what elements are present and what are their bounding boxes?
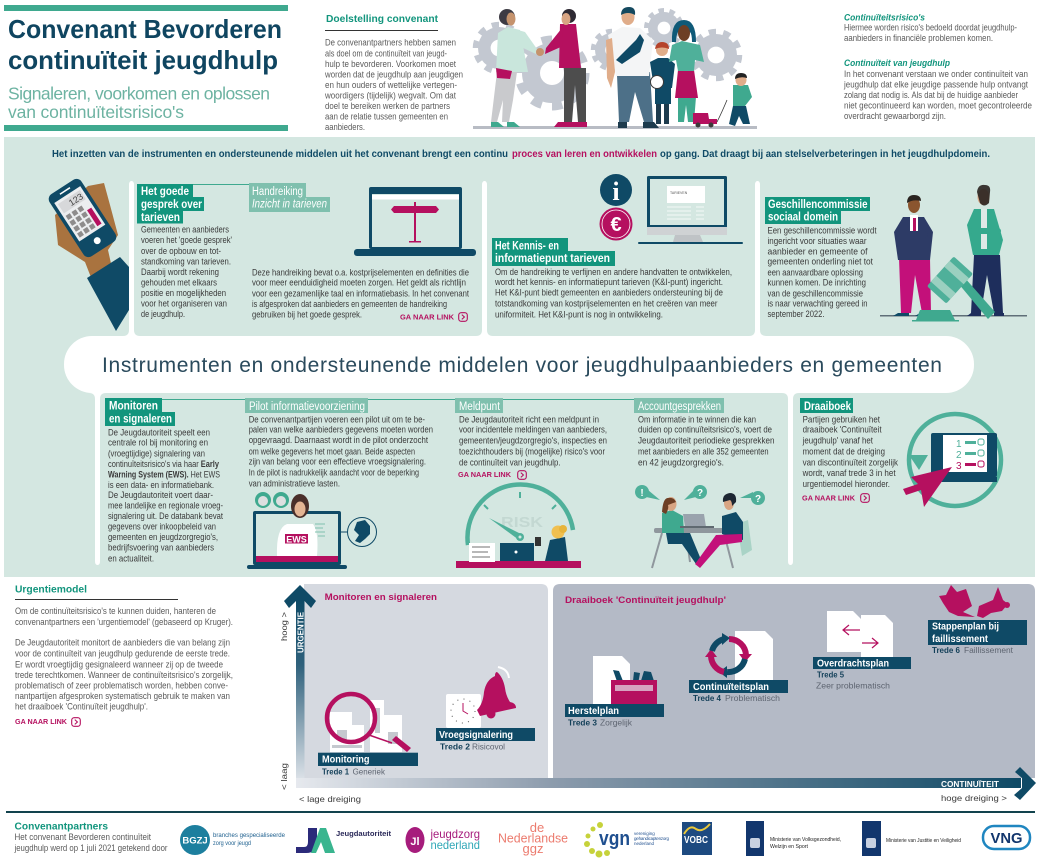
logo: jeugdzorg nederland: jeugdzorg <box>430 827 480 841</box>
label: en signaleren <box>109 413 172 425</box>
card: Pilot informatievoorziening <box>245 398 433 569</box>
card: Geschillencommissie: gemeenten onderling niet tot <box>768 257 874 267</box>
card: Kennis- en informatiepunt: Het K&I-punt biedt gemeenten en aanbieders ondersteuning bij de <box>495 288 723 298</box>
right man <box>967 185 1004 316</box>
label <box>800 398 853 413</box>
logo: jeugdzorg nederland <box>406 827 480 853</box>
label: tarieven <box>141 212 180 224</box>
subtitle: Signaleren, voorkomen en oplossen <box>8 84 270 104</box>
logo: Ministerie JenV <box>862 821 961 856</box>
icon: info: i <box>612 177 620 206</box>
panel: monitoren en signaleren <box>304 584 548 778</box>
title block <box>4 5 288 131</box>
footer text <box>14 820 168 853</box>
icon: broken piggy bank <box>939 585 1010 618</box>
icon: document and toolbox <box>593 656 657 704</box>
card: Meldpunt: de continuïteit van jeugdhulp. <box>459 457 560 467</box>
left man <box>893 195 933 316</box>
arrow: urgentie axis: hoog > <box>279 612 289 641</box>
card: Geschillencommissie: ingericht voor situaties waar <box>768 236 867 246</box>
card: Het goede gesprek over tarieven: voor het organiseren van <box>141 298 227 308</box>
text block: Urgentiemodel <box>15 583 233 726</box>
illustration: conversation at table <box>635 485 765 568</box>
card: Handreiking: voor een gezamenlijke taal en informatiebasis. In het convenant <box>252 288 469 298</box>
icon: laptop with signpost <box>354 187 476 256</box>
label: Overdrachtsplan: Zeer problematisch <box>816 680 890 690</box>
card: Kennis- en informatiepunt: uniformiteit. Het K&I-punt is nog in ontwikkeling. <box>495 309 663 319</box>
text block: Doelstelling convenant: Doelstelling convenant <box>326 13 438 25</box>
label: Continuïteitsplan <box>689 680 788 703</box>
logo: BGZJ <box>180 825 286 855</box>
card: Monitoren en signaleren: mee landelijke en regionale vroeg- <box>108 500 223 510</box>
man in magenta <box>536 9 587 127</box>
intro sentence <box>52 149 990 160</box>
card: Meldpunt: gemeenten/jeugdzorgregio's, inspecties en <box>459 435 607 445</box>
label: Continuïteitsplan: Problematisch <box>725 693 780 703</box>
toy truck <box>693 113 717 128</box>
logo: de Nederlandse ggz: ggz <box>523 841 543 856</box>
label: Continuïteitsplan: Continuïteitsplan <box>693 681 769 693</box>
card: Kennis- en informatiepunt: Om de handreiking te verfijnen en andere handvatten te ontwikkelen, <box>495 267 732 277</box>
text block: Doelstelling convenant: als doel om de continuïteit van jeugd- <box>325 48 447 58</box>
label: Stappenplan bij faillissement: Faillissement <box>964 645 1014 655</box>
text block: Urgentiemodel: Urgentiemodel <box>15 583 87 595</box>
card: Accountgesprekken: en 42 jeugdzorgregio's. <box>638 457 724 467</box>
card: Het goede gesprek over tarieven: Gemeenten en aanbieders <box>141 224 230 234</box>
card: Geschillencommissie: kunnen komen. De inrichting <box>768 278 866 288</box>
text block: definitions: zolang dat nodig is. Als dat bij de huidige aanbieder <box>844 90 1018 100</box>
label: gesprek over <box>141 199 202 211</box>
panel: draaiboek <box>553 584 1035 778</box>
label: Vroegsignalering <box>436 728 535 752</box>
link <box>458 471 526 479</box>
card: Accountgesprekken: met aanbieders en alle 352 gemeenten <box>638 446 769 456</box>
intro sentence: op gang. Dat draagt bij aan stelselverbeteringen in het jeugdhulpdomein. <box>660 149 990 160</box>
arrow: continuïteit axis <box>296 767 1036 804</box>
card: Geschillencommissie: een aanvaardbare oplossing <box>768 267 863 277</box>
label: Monitoring: Generiek <box>353 766 386 776</box>
logo: Ministerie VWS: Welzijn en Sport <box>770 844 808 850</box>
text block: Urgentiemodel: problematisch of zeer problematisch worden, hebben conve- <box>15 681 228 691</box>
logo: vgn: nederland <box>634 841 655 846</box>
link: GA NAAR LINK <box>15 719 67 726</box>
card: Pilot informatievoorziening: palen van welke aanbieders gegevens moeten worden <box>249 424 433 434</box>
label: Meldpunt <box>459 401 501 413</box>
label: Herstelplan: Zorgelijk <box>600 718 633 728</box>
card: Monitoren en signaleren: bedrijfsvoering van aanbieders <box>108 543 215 553</box>
icon: document and cycle arrows <box>705 631 773 680</box>
card: Accountgesprekken: Jeugdautoriteit periodieke gesprekken <box>638 435 775 445</box>
card: Monitoren en signaleren: De Jeugdautoriteit speelt een <box>108 427 210 437</box>
gavel <box>912 256 995 322</box>
text block: Doelstelling convenant: en hun ouders of wettelijke vertegen- <box>325 80 457 90</box>
label: Draaiboek <box>804 401 852 413</box>
intro sentence: Het inzetten van de instrumenten en ondersteunende middelen uit het convenant brengt een continu <box>52 149 508 160</box>
arrow: continuïteit axis: < lage dreiging <box>299 794 361 804</box>
card: Draaiboek: urgentiemodel hieronder. <box>803 479 890 489</box>
footer: convenantpartners <box>6 811 1035 858</box>
logo: BGZJ: BGZJ <box>182 836 208 846</box>
label <box>492 238 615 266</box>
card: Draaiboek: Partijen gebruiken het <box>803 414 880 424</box>
card: Monitoren en signaleren: is een data- en informatiebank. <box>108 480 214 490</box>
panel: monitoren en signaleren: Monitoren en signaleren <box>325 592 437 603</box>
illustration: conversation at table: ? <box>697 488 703 499</box>
boy with football <box>650 42 675 124</box>
logo: de Nederlandse ggz: de <box>530 820 544 835</box>
card: Meldpunt <box>455 398 607 568</box>
card: Het goede gesprek over tarieven: gehouden met elkaars <box>141 278 218 288</box>
label: Monitoring: Trede 1 <box>322 766 349 776</box>
text block: definitions: Continuïteitsrisico's <box>844 12 925 22</box>
text block: definitions <box>843 12 1032 121</box>
label <box>455 398 503 413</box>
text block: Urgentiemodel: Er wordt vroegtijdig gesignaleerd wanneer zij op de tweede <box>15 659 223 669</box>
logo: VNG <box>983 826 1030 849</box>
card: Monitoren en signaleren: signalering uit. De databank bevat <box>108 511 223 521</box>
icon: euro <box>600 208 632 240</box>
card: Draaiboek: draaiboek 'Continuïteit <box>803 425 882 435</box>
illustration: two men and gavel <box>880 185 1027 322</box>
logo: Ministerie JenV: Ministerie van Justitie en Veiligheid <box>886 838 961 844</box>
illustration: people and gears <box>473 7 757 129</box>
link <box>802 494 869 502</box>
label <box>765 197 870 224</box>
text block: Urgentiemodel: Om de continuïteitsrisico's te kunnen duiden, hanteren de <box>15 606 216 616</box>
man with bag <box>606 7 659 128</box>
card: Kennis- en informatiepunt <box>492 174 743 319</box>
label: Het goede <box>141 186 189 198</box>
label: Stappenplan bij faillissement: Trede 6 <box>932 645 960 655</box>
text block: Doelstelling convenant: doel te bereiken werken de partners <box>325 101 451 111</box>
illustration: conversation at table: ? <box>755 494 761 505</box>
subtitle <box>8 84 270 122</box>
card: Monitoren en signaleren: gemeenten en jeugdzorgregio's, <box>108 532 218 542</box>
arrow: urgentie axis: < laag <box>279 763 289 790</box>
card: Geschillencommissie: aanbieder en gemeente of <box>768 247 868 257</box>
subtitle: van continuïteitsrisico's <box>8 102 184 122</box>
intro sentence: proces van leren en ontwikkelen <box>512 149 657 160</box>
icon: two documents with arrows <box>827 611 893 657</box>
label: Vroegsignalering: Risicovol <box>472 742 505 752</box>
woman shaking hands <box>491 9 537 127</box>
card: Handreiking: Deze handreiking bevat o.a. kostprijselementen en definities die <box>252 267 469 277</box>
label: Stappenplan bij faillissement: faillissement <box>932 633 988 645</box>
card: Monitoren en signaleren: Warning System (EWS). Het EWS <box>108 470 220 480</box>
link <box>400 313 467 322</box>
label: Herstelplan: Herstelplan <box>568 705 619 717</box>
card: Handreiking <box>249 183 476 322</box>
label: Stappenplan bij faillissement <box>928 620 1027 655</box>
label: Het Kennis- en <box>495 240 559 252</box>
label: Pilot informatievoorziening <box>249 401 365 413</box>
card: Pilot informatievoorziening: In de pilot is nadrukkelijk aandacht voor de beperking <box>249 467 419 477</box>
woman with teal top <box>669 20 704 122</box>
label <box>249 183 330 212</box>
card: Draaiboek: wordt, vanaf trede 3 in het <box>802 468 896 478</box>
icon: city under magnifier <box>327 694 411 752</box>
card: Pilot informatievoorziening: De convenantpartijen voeren een pilot uit om te be- <box>249 414 425 424</box>
logo: vgn: vereniging <box>634 831 655 836</box>
illustration: risk gauge: RISK <box>501 514 543 531</box>
arrow: urgentie axis <box>279 585 316 790</box>
title: continuïteit jeugdhulp <box>8 45 278 75</box>
card: Pilot informatievoorziening: van administratieve lasten. <box>249 478 340 488</box>
illustration: EWS laptop: EWS <box>286 534 307 544</box>
text block: Urgentiemodel: voor de continuïteit van jeugdhulp gedurende de eerste trede. <box>15 648 230 658</box>
logo: Ministerie VWS: Ministerie van Volksgezondheid, <box>770 837 841 843</box>
card: Het goede gesprek over tarieven: over de opbouw en tot- <box>141 246 221 256</box>
text block: Urgentiemodel: De Jeugdautoriteit monitort de aanbieders die van belang zijn <box>15 638 230 648</box>
text block: Doelstelling convenant: aanbieders. <box>325 122 365 132</box>
card: Het goede gesprek over tarieven <box>137 184 250 319</box>
logo: vgn: vgn <box>599 828 630 850</box>
link: GA NAAR LINK <box>802 496 855 502</box>
label: Continuïteitsplan: Trede 4 <box>693 693 721 703</box>
text block: Doelstelling convenant: woordigers (tijdelijk) wegvalt. Om dat <box>324 90 457 100</box>
icon: phone with calculator: 123 <box>67 191 85 208</box>
label: informatiepunt tarieven <box>495 253 610 265</box>
card: Monitoren en signaleren: en actualiteit. <box>108 553 154 563</box>
text block: Urgentiemodel: nantpartijen afgesproken systematisch gebruik te maken van <box>15 691 230 701</box>
label: Monitoren <box>109 400 158 412</box>
text block: Doelstelling convenant: worden dat de jeugdhulp aan jeugdigen <box>324 69 463 79</box>
icon: euro: € <box>610 214 622 236</box>
card: Monitoren en signaleren: (vroegtijdige) signalering van <box>108 448 205 458</box>
text block: definitions: aanbieders in financiële problemen komen. <box>844 33 993 43</box>
text block: definitions: Continuïteit van jeugdhulp <box>844 58 950 68</box>
card: Accountgesprekken: duiden op continuïteitsrisico's, voert de <box>638 425 772 435</box>
card: Handreiking: voor meer eenduidigheid moeten zorgen. Het geldt als richtlijn <box>252 278 466 288</box>
icon: info <box>600 174 632 206</box>
label <box>634 398 724 413</box>
card: Geschillencommissie: van de geschillencommissie <box>768 288 863 298</box>
icon: clock and bell <box>446 667 516 728</box>
card: Meldpunt: De Jeugdautoriteit richt een meldpunt in <box>459 414 599 424</box>
icon: phone with calculator <box>46 177 129 331</box>
card: Draaiboek <box>800 398 1001 507</box>
label: Overdrachtsplan <box>813 657 911 690</box>
card: Kennis- en informatiepunt: totstandkoming van kostprijselementen en het creëren van meer <box>495 298 718 308</box>
logo: VOBC <box>682 822 712 855</box>
label: Overdrachtsplan: Trede 5 <box>817 670 844 680</box>
icon: cycle with laptop <box>903 414 1001 507</box>
logo: vgn: gehandicaptenzorg <box>634 836 669 841</box>
label: Herstelplan <box>565 704 664 728</box>
card: Handreiking: gebruiken bij het goede gesprek. <box>252 309 362 319</box>
card: Meldpunt: toezichthouders bij (mogelijke) risico's voor <box>459 446 605 456</box>
label: Monitoring <box>318 753 418 776</box>
footer text: Convenantpartners <box>14 820 108 832</box>
logo: vgn <box>584 822 669 858</box>
text block: Doelstelling convenant: De convenantpartners hebben samen <box>325 38 456 48</box>
text block: Doelstelling convenant <box>324 13 463 132</box>
icon: monitor: TARIEVEN <box>670 191 688 195</box>
card: Monitoren en signaleren <box>105 398 223 563</box>
arrow: continuïteit axis: CONTINUÏTEIT <box>941 779 1000 789</box>
card: Draaiboek: van discontinuïteit zorgelijk <box>803 457 899 467</box>
card: Geschillencommissie: Een geschillencommissie wordt <box>768 226 877 236</box>
title <box>8 14 282 75</box>
label: Herstelplan: Trede 3 <box>568 718 597 728</box>
card: Het goede gesprek over tarieven: standkoming van tarieven. <box>141 256 231 266</box>
label: Monitoring: Monitoring <box>322 754 370 766</box>
logo: BGZJ: branches gespecialiseerde <box>213 833 286 839</box>
logo: de Nederlandse ggz: Nederlandse <box>498 830 568 846</box>
card: Het goede gesprek over tarieven: Daarbij wordt rekening <box>141 267 219 277</box>
label <box>137 184 204 224</box>
logo: BGZJ: zorg voor jeugd <box>213 841 251 847</box>
card: Monitoren en signaleren: centrale rol bij monitoring en <box>108 438 208 448</box>
label: Vroegsignalering: Vroegsignalering <box>439 729 513 741</box>
link <box>15 718 80 726</box>
card: Het goede gesprek over tarieven: de jeugdhulp. <box>141 309 185 319</box>
card: Meldpunt: voor incidentele meldingen van aanbieders, <box>459 425 607 435</box>
label: Accountgesprekken <box>638 401 721 413</box>
label <box>105 398 175 426</box>
logo: jeugdzorg nederland: nederland <box>430 838 480 852</box>
label: Vroegsignalering: Trede 2 <box>440 742 470 752</box>
illustration: conversation at table: ! <box>640 488 644 499</box>
text block: Urgentiemodel: trede terechtkomen. Wanneer de continuïteitsrisico's zorgelijk, <box>15 670 233 680</box>
card: Handreiking: is afgesproken dat aanbieders en gemeenten de handreiking <box>252 299 447 309</box>
icon: cycle with laptop: 2 <box>956 450 962 461</box>
arrow: continuïteit axis: hoge dreiging > <box>941 793 1007 803</box>
text block: Doelstelling convenant: hulp te bevorderen. Voorkomen moet <box>325 59 457 69</box>
logo: Jeugdautoriteit <box>296 828 392 853</box>
card: Draaiboek: jeugdhulp' vanaf het <box>802 435 873 445</box>
label: sociaal domein <box>768 212 838 224</box>
logo: jeugdzorg nederland: Jl <box>410 836 420 848</box>
title: Convenant Bevorderen <box>8 14 282 44</box>
icon: cycle with laptop: 1 <box>956 439 962 450</box>
card: Geschillencommissie: september 2022. <box>768 309 824 319</box>
card: Kennis- en informatiepunt: wordt het kennis- en informatiepunt tarieven (K&I-punt) ingericht. <box>494 277 723 287</box>
label: Geschillencommissie <box>768 199 868 211</box>
illustration: EWS laptop <box>247 492 376 569</box>
card: Monitoren en signaleren: De Jeugdautoriteit voert daar- <box>108 490 213 500</box>
label: Handreiking <box>252 186 303 198</box>
illustration: risk gauge <box>456 484 581 568</box>
link: GA NAAR LINK <box>400 314 454 322</box>
panel: draaiboek: Draaiboek 'Continuïteit jeugdhulp' <box>565 595 726 606</box>
label: Stappenplan bij faillissement: Stappenplan bij <box>932 620 999 632</box>
label: Inzicht in tarieven <box>252 198 327 210</box>
label: Overdrachtsplan: Overdrachtsplan <box>817 658 889 670</box>
logo: Jeugdautoriteit: Jeugdautoriteit <box>336 829 392 838</box>
card: Het goede gesprek over tarieven: voeren het 'goede gesprek' <box>141 235 232 245</box>
link: GA NAAR LINK <box>458 472 511 479</box>
card: Het goede gesprek over tarieven: positie en mogelijkheden <box>141 288 226 298</box>
text block: Urgentiemodel: convenantpartners een 'urgentiemodel' (gebaseerd op Kruger). <box>15 617 233 627</box>
footer text: jeugdhulp werd op 1 juli 2021 getekend door <box>14 843 168 853</box>
heading pill: Instrumenten en ondersteunende middelen voor jeugdhulpaanbieders en gemeenten <box>102 354 942 377</box>
card: Draaiboek: moment dat de dreiging <box>803 446 885 456</box>
text block: definitions: overdracht gewaarborgd zijn. <box>844 111 946 121</box>
icon: monitor <box>638 176 743 244</box>
logo: VOBC: VOBC <box>684 835 708 846</box>
card: Pilot informatievoorziening: zijn van belang voor een effectieve vroegsignalering. <box>249 457 426 467</box>
logo: de Nederlandse ggz <box>498 820 568 856</box>
chart: urgentiemodel <box>279 584 1036 804</box>
icon: cycle with laptop: 3 <box>956 461 962 472</box>
card: Accountgesprekken <box>634 398 775 568</box>
card: Monitoren en signaleren: gegevens over inkoopbeleid van <box>108 522 216 532</box>
text block: Urgentiemodel: het draaiboek 'Continuïteit jeugdhulp'. <box>15 701 148 711</box>
logo: VNG: VNG <box>990 830 1022 847</box>
arrow: urgentie axis: URGENTIE <box>296 612 306 653</box>
card: Geschillencommissie <box>765 197 877 319</box>
footer text: Het convenant Bevorderen continuïteit <box>14 832 151 842</box>
card: Geschillencommissie: is naar verwachting gereed in <box>768 298 868 308</box>
card: Accountgesprekken: Om informatie in te winnen die kan <box>638 414 756 424</box>
heading pill <box>64 336 974 393</box>
card: Monitoren en signaleren: continuïteitsrisico's via haar Early <box>108 459 219 469</box>
card: Pilot informatievoorziening: opgevraagd. Daarnaast wordt in de pilot onderzocht <box>249 435 428 445</box>
child walking <box>717 73 752 126</box>
card: Pilot informatievoorziening: om welke gegevens het moet gaan. Beide aspecten <box>249 446 415 456</box>
text block: Doelstelling convenant: aan de relatie tussen gemeenten en <box>325 111 448 121</box>
logo: Ministerie VWS <box>746 821 841 856</box>
